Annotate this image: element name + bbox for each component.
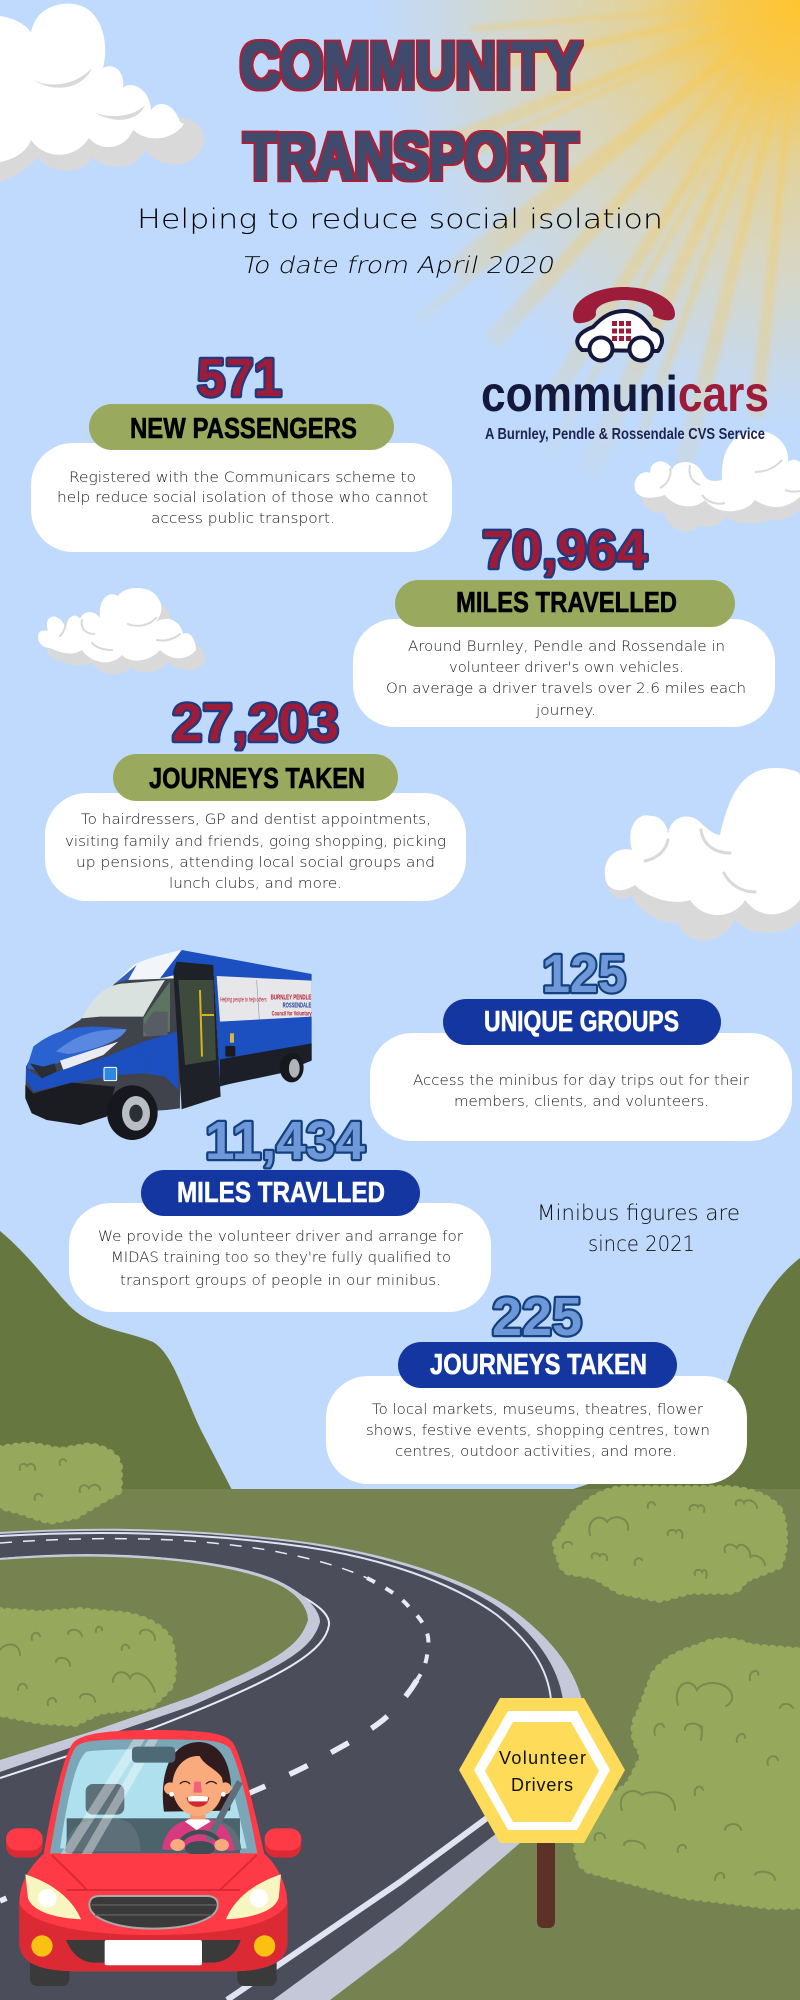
stat: journeys taken	[45, 693, 466, 901]
title	[240, 28, 582, 193]
description	[386, 639, 746, 719]
windscreen glare and rear-view mirror	[61, 1739, 175, 1854]
note: minibus figures	[537, 1201, 740, 1256]
cloud: top left	[0, 4, 204, 182]
wing mirrors	[6, 1828, 301, 1858]
description	[366, 1402, 710, 1460]
number 571: 571	[197, 348, 282, 408]
date line: To date from April 2020	[240, 252, 557, 279]
number 225: 225	[492, 1287, 582, 1347]
minibus photo: ROSSENDALE	[283, 1000, 311, 1009]
windscreen	[50, 1739, 257, 1853]
ground	[0, 1489, 800, 2000]
icon: car with keypad	[577, 311, 662, 360]
minibus photo	[25, 950, 312, 1140]
description: On average a driver travels over 2.6 miles each	[386, 681, 746, 697]
lower vent	[66, 1940, 241, 1963]
sign inner hexagon	[485, 1722, 599, 1822]
bush: top right	[556, 1490, 783, 1598]
pill heading: NEW PASSENGERS	[130, 413, 357, 445]
sign white ring	[474, 1711, 610, 1830]
logo: communicars	[481, 287, 769, 443]
card	[45, 793, 466, 901]
note: minibus figures: since 2021	[588, 1232, 695, 1256]
driver	[162, 1742, 240, 1856]
hill: right	[570, 1258, 800, 1490]
description: Registered with the Communicars scheme to	[69, 470, 416, 486]
card	[326, 1376, 747, 1484]
description: Access the minibus for day trips out for their	[413, 1073, 749, 1089]
pill heading: MILES TRAVELLED	[456, 587, 677, 619]
pill heading	[113, 754, 398, 801]
sign outer hexagon	[459, 1698, 625, 1843]
pill heading: UNIQUE GROUPS	[484, 1006, 679, 1038]
road sign: volunteer drivers	[459, 1698, 625, 1928]
headlights	[25, 1874, 281, 1919]
bush: left mid	[0, 1612, 172, 1722]
car body	[19, 1854, 287, 1971]
car wheels	[30, 1957, 277, 1986]
description: shows, festive events, shopping centres, town	[366, 1423, 710, 1439]
bush: top left	[0, 1447, 118, 1520]
description	[98, 1229, 463, 1289]
description: centres, outdoor activities, and more.	[395, 1444, 677, 1460]
stat: miles travelled	[353, 520, 775, 727]
description	[65, 812, 446, 892]
sign text: Volunteer	[499, 1748, 586, 1768]
description: We provide the volunteer driver and arrange for	[98, 1229, 463, 1245]
description: up pensions, attending local social groups and	[76, 855, 435, 871]
card	[69, 1203, 491, 1312]
description: access public transport.	[151, 511, 335, 527]
number 27,203: 27,203	[172, 693, 339, 753]
description: journey.	[535, 703, 596, 719]
description: MIDAS training too so they're fully qualified to	[111, 1250, 451, 1266]
number 125: 125	[542, 944, 626, 1004]
sign text: Drivers	[511, 1775, 573, 1795]
pill heading	[141, 1170, 420, 1216]
stat: unique groups	[370, 944, 792, 1141]
description: volunteer driver's own vehicles.	[449, 660, 684, 676]
title: TRANSPORT	[244, 119, 578, 193]
sun with rays	[370, 0, 800, 492]
title: COMMUNITY	[240, 28, 582, 102]
pill heading	[395, 580, 735, 627]
sign post	[537, 1830, 555, 1928]
car cabin	[43, 1730, 265, 1857]
number plate	[105, 1940, 202, 1965]
road	[0, 1529, 584, 2000]
minibus photo: Helping people to help others	[220, 997, 267, 1004]
description: To local markets, museums, theatres, flower	[372, 1402, 703, 1418]
description	[57, 470, 428, 527]
lower bumper shade	[19, 1903, 287, 1971]
stat: minibus journeys	[326, 1287, 747, 1484]
cloud: large right	[605, 768, 800, 941]
icon: telephone handset	[573, 287, 675, 323]
number 70,964: 70,964	[482, 520, 647, 580]
card	[31, 443, 452, 552]
description: lunch clubs, and more.	[169, 876, 342, 892]
cloud: small left	[38, 588, 205, 674]
minibus photo: BURNLEY PENDLE	[271, 992, 311, 1001]
card	[370, 1033, 792, 1141]
logo wordmark: communicars	[481, 366, 769, 422]
cloud: right of passengers card	[635, 431, 800, 531]
fog lights	[31, 1935, 53, 1957]
number 11,434: 11,434	[205, 1111, 365, 1171]
pill heading: MILES TRAVLLED	[177, 1177, 385, 1209]
sign text	[499, 1748, 586, 1795]
pill heading	[443, 999, 721, 1045]
hill: left	[0, 1231, 232, 1490]
description: Around Burnley, Pendle and Rossendale in	[408, 639, 725, 655]
pill heading: JOURNEYS TAKEN	[430, 1349, 647, 1381]
description: help reduce social isolation of those who cannot	[57, 490, 428, 506]
description: To hairdressers, GP and dentist appointments,	[81, 812, 431, 828]
bush: right large	[577, 1642, 800, 1905]
description: transport groups of people in our minibus.	[120, 1273, 441, 1289]
stat: minibus miles	[69, 1111, 491, 1312]
description: members, clients, and volunteers.	[454, 1094, 709, 1110]
grille	[89, 1896, 218, 1929]
pill heading	[89, 404, 394, 450]
description	[413, 1073, 749, 1110]
card	[353, 619, 775, 727]
pill heading	[398, 1342, 677, 1388]
description: visiting family and friends, going shopping, picking	[65, 834, 446, 850]
pill heading: JOURNEYS TAKEN	[149, 763, 365, 795]
note: minibus figures: Minibus figures are	[537, 1201, 740, 1225]
stat: new passengers	[31, 348, 452, 552]
subtitle: Helping to reduce social isolation	[137, 204, 663, 235]
minibus photo: Council for Voluntary	[272, 1011, 312, 1018]
illustration: red car with smiling driver	[6, 1730, 301, 1986]
